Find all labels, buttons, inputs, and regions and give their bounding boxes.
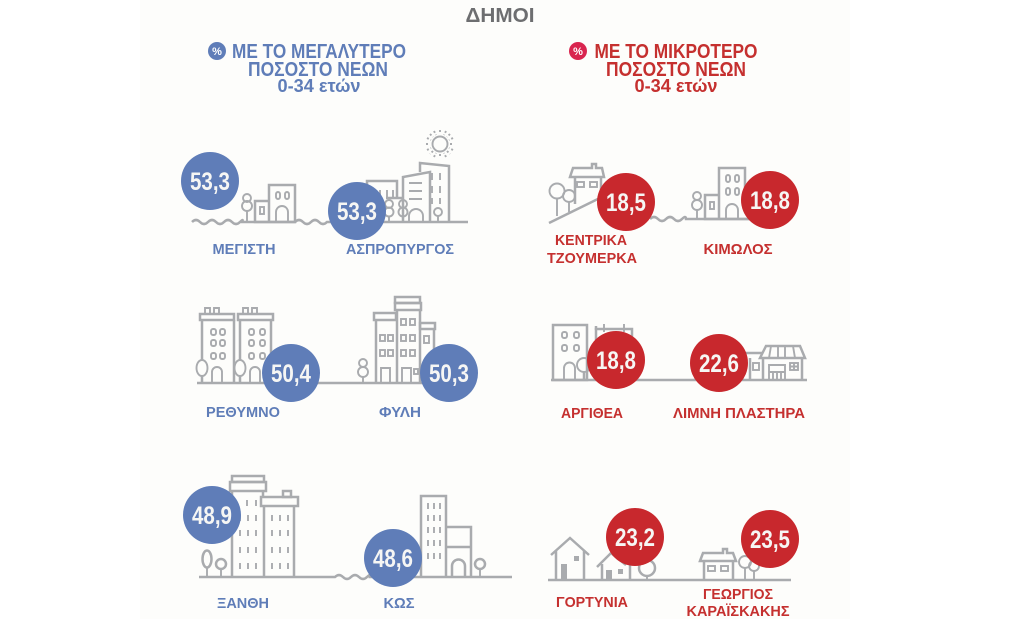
badge: 22,6: 22,6 [699,350,739,378]
heading: largest share of young people [208,40,406,96]
ground line: row 1 left [192,220,468,224]
badge: 50,4: 50,4 [271,360,311,388]
label: ΛΙΜΝΗ ΠΛΑΣΤΗΡΑ [673,405,805,422]
icon: small town [242,185,295,222]
municipality: ΚΕΝΤΡΙΚΑ ΤΖΟΥΜΕΡΚΑ [547,164,655,267]
icon: two houses and tree [551,538,655,580]
heading: smallest share of young people: 0-34 ετών [634,76,718,96]
icon: hillside house [549,164,606,223]
label: ΡΕΘΥΜΝΟ [206,404,280,421]
ground line: row 2 left [197,382,440,384]
heading: largest share of young people: ΠΟΣΟΣΤΟ ΝΕΩΝ [248,58,388,81]
badge: 53,3: 53,3 [190,168,230,196]
icon: shop with awning [745,346,805,380]
municipality: ΚΕΝΤΡΙΚΑ ΤΖΟΥΜΕΡΚΑ: ΤΖΟΥΜΕΡΚΑ [547,250,637,267]
municipality: ΓΟΡΤΥΝΙΑ [551,508,664,611]
badge: 53,3: 53,3 [337,198,377,226]
municipality: ΑΡΓΙΘΕΑ [553,324,645,422]
badge: 23,5: 23,5 [750,526,790,554]
municipality: ΓΕΩΡΓΙΟΣ ΚΑΡΑΪΣΚΑΚΗΣ [686,510,799,619]
icon: city with sun [367,130,454,222]
label: ΓΟΡΤΥΝΙΑ [556,594,628,611]
label: ΓΕΩΡΓΙΟΣ [703,586,773,603]
label: ΚΩΣ [384,595,414,612]
icon: twin apartment blocks [196,308,273,383]
icon: percent badge red: % [573,46,583,58]
municipality: ΚΙΜΩΛΟΣ [692,168,799,258]
ground line: row 1 right [650,217,750,221]
icon: sun [426,130,454,158]
label: ΜΕΓΙΣΤΗ [212,241,276,258]
ground line: row 3 left [199,575,512,579]
heading: smallest share of young people [569,40,758,96]
icon: percent badge blue: % [212,46,222,58]
municipality: ΡΕΘΥΜΝΟ [196,308,320,421]
ground line: row 3 right [548,579,791,581]
municipality: ΛΙΜΝΗ ΠΛΑΣΤΗΡΑ [673,334,805,422]
municipality: ΦΥΛΗ [358,297,478,421]
municipality: ΑΣΠΡΟΠΥΡΓΟΣ [328,130,454,258]
heading: largest share of young people: ΜΕ ΤΟ ΜΕΓΑΛΥΤΕΡΟ [232,40,406,63]
heading: smallest share of young people: ΠΟΣΟΣΤΟ ΝΕΩΝ [606,58,746,81]
badge: 48,9: 48,9 [192,502,232,530]
label: ΦΥΛΗ [379,404,421,421]
badge: 48,6: 48,6 [373,545,413,573]
badge: 50,3: 50,3 [429,360,469,388]
ground line: row 2 right [551,379,807,381]
label: ΑΡΓΙΘΕΑ [561,405,623,422]
municipality: ΞΑΝΘΗ [183,476,298,612]
icon: building and block [553,324,632,380]
heading: smallest share of young people: ΜΕ ΤΟ ΜΙΚΡΟΤΕΡΟ [594,40,758,63]
icon: high-rise blocks [202,476,298,577]
municipality: ΜΕΓΙΣΤΗ [181,152,295,258]
icon: percent badge red [569,42,587,60]
icon: small town [692,168,750,219]
title: ΔΗΜΟΙ [466,5,534,27]
badge: 23,2: 23,2 [615,524,655,552]
badge: 18,8: 18,8 [750,187,790,215]
label: ΞΑΝΘΗ [217,595,269,612]
label: ΚΙΜΩΛΟΣ [704,241,772,258]
label: ΚΕΝΤΡΙΚΑ [555,232,627,249]
label: ΑΣΠΡΟΠΥΡΓΟΣ [346,241,454,258]
heading: largest share of young people: 0-34 ετών [278,76,360,96]
icon: tall blocks [358,297,435,383]
icon: tower and low building [421,496,485,577]
icon: house with trees [700,549,759,580]
municipality: ΚΩΣ [364,496,485,612]
badge: 18,5: 18,5 [606,189,646,217]
badge: 18,8: 18,8 [596,347,636,375]
icon: percent badge blue [208,42,226,60]
